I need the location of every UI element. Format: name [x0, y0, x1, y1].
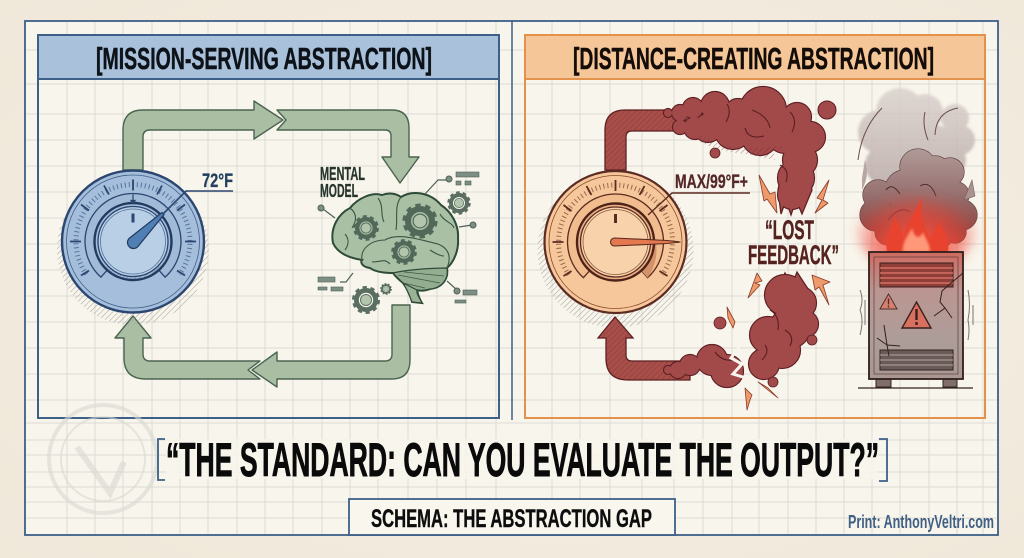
arrow: feedback top to brain — [123, 101, 419, 183]
text: mental model — [320, 164, 365, 201]
smoke cloud: bottom — [664, 272, 818, 392]
arrow: feedback bottom to dial — [115, 305, 410, 387]
arrow: broken feedback bottom — [598, 317, 690, 380]
arrow: broken feedback top — [605, 110, 685, 170]
dial label: max/99°F+ — [648, 172, 750, 215]
spark bolts — [727, 175, 830, 410]
icon: orange shadow hatch — [538, 172, 694, 328]
panel border — [38, 35, 499, 418]
icon: blue thermostat dial — [57, 170, 209, 325]
furnace flames — [854, 177, 978, 273]
panel header: mission-serving — [38, 35, 499, 79]
panel header: distance-creating — [525, 35, 985, 79]
text: lost feedback: “LOST — [765, 215, 814, 245]
furnace smoke — [858, 88, 977, 250]
panel header: mission-serving: [MISSION-SERVING ABSTRACTION] — [96, 41, 432, 76]
panel: distance-creating abstraction — [525, 35, 985, 418]
cracks — [877, 273, 963, 356]
needle — [610, 238, 680, 246]
text: lost feedback — [748, 215, 839, 270]
text: mental model: MENTAL — [320, 164, 365, 184]
schema label: SCHEMA: THE ABSTRACTION GAP — [371, 505, 652, 533]
needle — [127, 212, 164, 249]
schema label — [349, 499, 675, 535]
icon: orange thermostat dial pegged at max — [544, 171, 686, 313]
watermark seal — [49, 405, 157, 513]
warning triangles — [902, 302, 931, 328]
dial label: max/99°F+: MAX/99°F+ — [675, 172, 748, 193]
dial label: 72°F — [163, 171, 233, 214]
text: mental model: MODEL — [320, 181, 358, 201]
icon: brain with gears — [332, 193, 458, 303]
lightning crack gap — [731, 343, 746, 392]
brain callouts and small gears — [318, 172, 479, 312]
text: lost feedback: FEEDBACK” — [748, 240, 839, 270]
smoke cloud: top — [664, 87, 836, 215]
icon: burning furnace — [854, 88, 978, 388]
panel border — [525, 35, 985, 418]
dial label: 72°F: 72°F — [202, 171, 233, 192]
panel: mission-serving abstraction — [38, 35, 499, 418]
vibration marks — [860, 290, 973, 340]
furnace cabinet — [858, 252, 973, 388]
